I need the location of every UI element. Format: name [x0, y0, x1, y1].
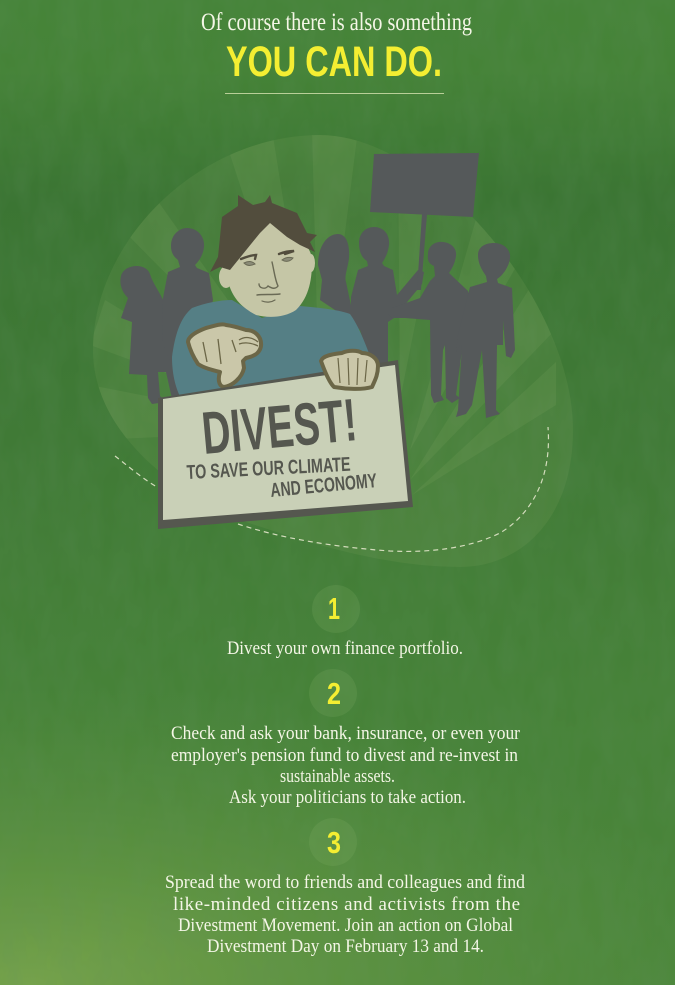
sign headline: DIVEST!: [199, 386, 360, 467]
step 2 text: employer's pension fund to divest and re-invest in: [171, 745, 518, 766]
illustration: [90, 130, 573, 567]
step 3 text: [165, 872, 525, 957]
headline: YOU CAN DO.: [226, 38, 442, 86]
step 3: [165, 818, 525, 957]
number badge 3: 3: [327, 825, 341, 860]
step 2 text: sustainable assets.: [280, 766, 395, 787]
step 1: [227, 585, 463, 659]
sunburst blob: [90, 130, 573, 567]
step 3 text: Divestment Movement. Join an action on Global: [178, 915, 513, 936]
main figure: [158, 195, 413, 529]
man silhouette left: [162, 228, 213, 375]
man holding placard: [351, 227, 424, 368]
sign subline two: AND ECONOMY: [269, 470, 378, 502]
dashed path: [115, 427, 548, 551]
placard pole: [417, 214, 427, 290]
step 1 text: Divest your own finance portfolio.: [227, 638, 463, 659]
sign subline one: TO SAVE OUR CLIMATE: [186, 454, 351, 484]
step 2 text: Check and ask your bank, insurance, or even your: [171, 723, 521, 744]
facial features: [241, 251, 294, 302]
tall man silhouette: [456, 243, 515, 418]
number badge 1: [312, 585, 360, 633]
hair: [210, 195, 317, 272]
crowd silhouettes: [120, 153, 515, 418]
number badge 1: 1: [328, 591, 340, 626]
ponytail woman silhouette: [318, 234, 352, 320]
man in cap: [388, 242, 470, 403]
face: [222, 222, 312, 317]
step 2: [171, 669, 521, 808]
number badge 2: 2: [327, 676, 341, 711]
step 3 text: Divestment Day on February 13 and 14.: [207, 936, 484, 957]
holding fist: [321, 351, 378, 389]
title: [201, 9, 472, 86]
pointing hand: [188, 324, 261, 387]
sign board: [158, 360, 413, 529]
number badge 2: [309, 669, 357, 717]
step 3 text: Spread the word to friends and colleagues and find: [165, 872, 525, 893]
placard: [370, 153, 479, 217]
step 2 text: Ask your politicians to take action.: [229, 787, 466, 808]
ears: [219, 254, 315, 288]
blue shirt: [172, 300, 378, 400]
step 3 text: like-minded citizens and activists from the: [173, 894, 520, 915]
step 2 text: [171, 723, 521, 808]
girl silhouette: [120, 266, 180, 404]
title line: Of course there is also something: [201, 9, 472, 36]
number badge 3: [309, 818, 357, 866]
